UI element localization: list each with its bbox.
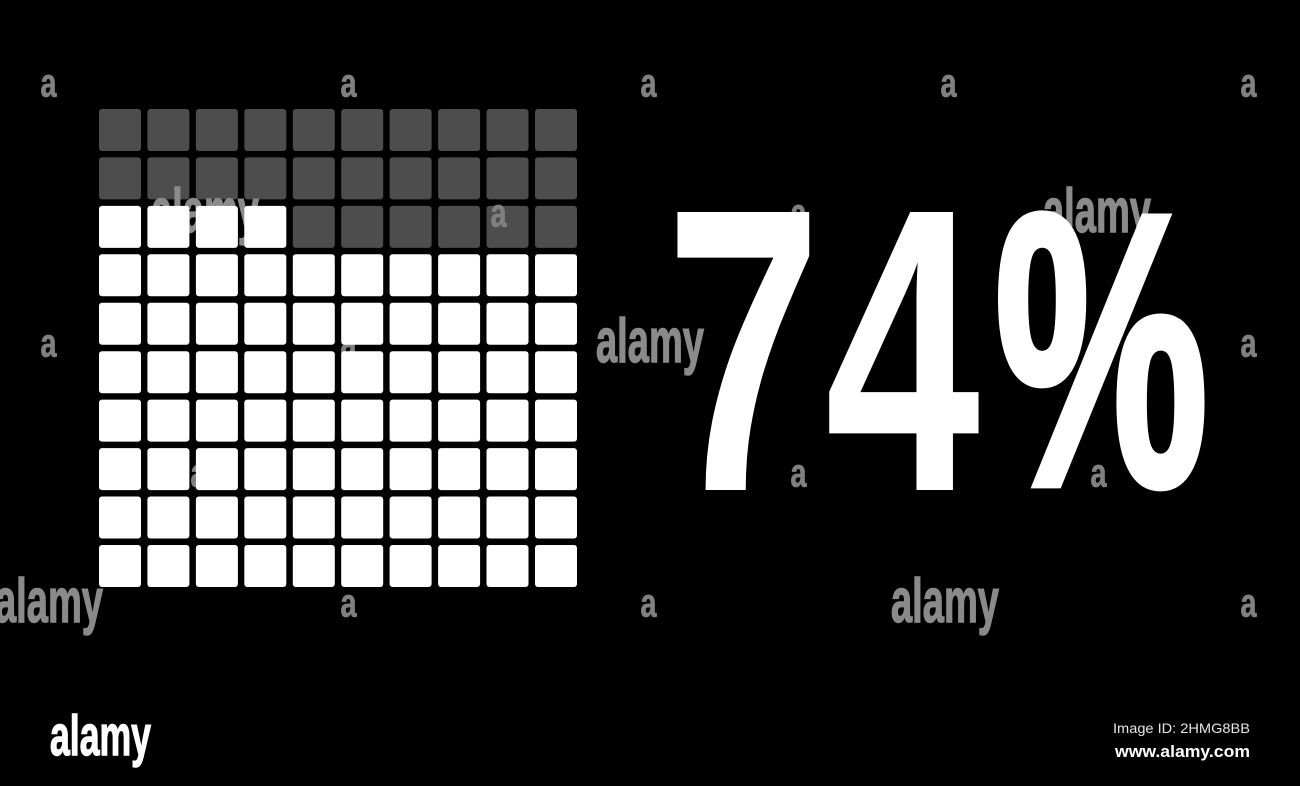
watermark: repeated alamy marks: a	[940, 62, 957, 106]
watermark: repeated alamy marks: alamy	[0, 567, 103, 636]
watermark: repeated alamy marks: a	[190, 452, 207, 496]
watermark: repeated alamy marks: alamy	[891, 567, 999, 636]
watermark: repeated alamy marks: a	[490, 192, 507, 236]
watermark: repeated alamy marks: a	[1240, 582, 1257, 626]
alamy logo: alamy	[50, 704, 151, 768]
watermark: repeated alamy marks: a	[340, 322, 357, 366]
watermark: repeated alamy marks: alamy	[151, 177, 259, 246]
watermark: repeated alamy marks: a	[640, 582, 657, 626]
filled waffle cells (74)	[99, 206, 577, 587]
watermark: repeated alamy marks: a	[40, 322, 57, 366]
watermark: repeated alamy marks: a	[1240, 62, 1257, 106]
image id and website: Image ID: 2HMG8BB	[1113, 720, 1250, 736]
watermark: repeated alamy marks: alamy	[596, 307, 704, 376]
image id and website	[1113, 720, 1250, 761]
watermark: repeated alamy marks: a	[340, 62, 357, 106]
watermark: repeated alamy marks: alamy	[1043, 177, 1151, 246]
big percentage value: 4	[825, 125, 982, 576]
watermark: repeated alamy marks: a	[790, 452, 807, 496]
watermark: repeated alamy marks	[0, 62, 1257, 636]
unfilled waffle cells (26)	[99, 109, 577, 248]
big percentage value	[665, 124, 1208, 576]
watermark: repeated alamy marks: a	[340, 582, 357, 626]
watermark: repeated alamy marks: a	[1090, 452, 1107, 496]
watermark: repeated alamy marks: a	[640, 62, 657, 106]
image id and website: www.alamy.com	[1114, 743, 1250, 761]
big percentage value: %	[994, 135, 1208, 567]
watermark: repeated alamy marks: a	[40, 62, 57, 106]
watermark: repeated alamy marks: a	[790, 192, 807, 236]
watermark: repeated alamy marks: a	[1240, 322, 1257, 366]
big percentage value: 7	[665, 124, 822, 576]
